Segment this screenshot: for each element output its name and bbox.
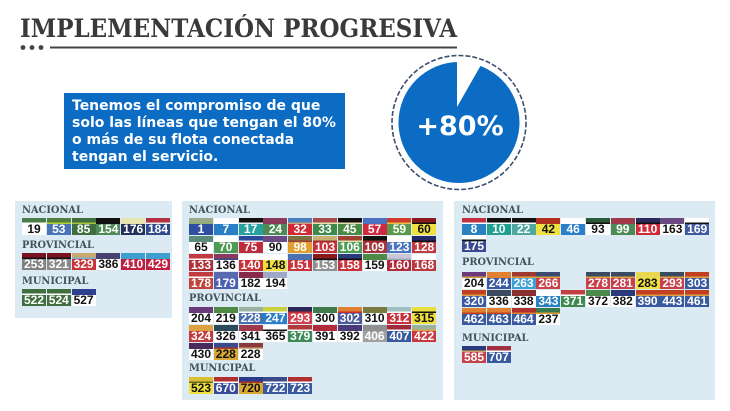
lines nacional: 128 — [414, 240, 434, 254]
pie icon: +80%: +80% — [416, 111, 504, 142]
heading: nacional: NACIONAL — [189, 205, 250, 216]
lines nacional: 22 — [517, 222, 530, 236]
lines provincial: 278 — [588, 276, 608, 290]
lines nacional: 98 — [294, 240, 307, 254]
lines nacional: 184 — [148, 222, 168, 236]
panel: right lines — [454, 201, 715, 400]
lines municipal: 523 — [191, 381, 211, 395]
lines provincial: 219 — [216, 311, 236, 325]
lines provincial: 204 — [464, 276, 484, 290]
lines nacional: 163 — [662, 222, 682, 236]
lines nacional: 160 — [389, 258, 409, 272]
lines nacional: 53 — [52, 222, 65, 236]
lines provincial: 228 — [216, 347, 236, 361]
lines provincial: 253 — [24, 257, 44, 271]
lines nacional: 136 — [216, 258, 236, 272]
lines provincial: 464 — [514, 312, 534, 326]
lines provincial: 338 — [514, 294, 534, 308]
lines provincial: 336 — [489, 294, 509, 308]
lines nacional: 57 — [368, 222, 381, 236]
lines municipal: 670 — [216, 381, 236, 395]
lines municipal — [189, 377, 312, 395]
lines provincial: 372 — [588, 294, 608, 308]
lines provincial: 371 — [563, 294, 583, 308]
lines nacional: 75 — [244, 240, 257, 254]
lines provincial: 293 — [290, 311, 310, 325]
lines nacional — [22, 218, 170, 236]
lines provincial: 341 — [241, 329, 261, 343]
lines nacional: 19 — [27, 222, 41, 236]
heading: provincial: PROVINCIAL — [189, 293, 261, 304]
lines nacional — [189, 218, 436, 290]
lines provincial: 382 — [613, 294, 633, 308]
lines provincial: 406 — [365, 329, 385, 343]
lines nacional: 90 — [269, 240, 282, 254]
lines nacional: 65 — [194, 240, 208, 254]
lines provincial: 463 — [489, 312, 509, 326]
title: IMPLEMENTACIÓN PROGRESIVA — [20, 14, 457, 43]
lines nacional: 175 — [464, 239, 484, 253]
callout: commitment text: solo las líneas que tengan el 80% — [72, 115, 336, 131]
heading: provincial: PROVINCIAL — [22, 240, 94, 251]
lines municipal — [462, 346, 511, 364]
lines municipal: 527 — [74, 293, 94, 307]
lines nacional: 70 — [219, 240, 232, 254]
lines nacional: 60 — [417, 222, 431, 236]
heading: nacional: NACIONAL — [462, 205, 523, 216]
lines provincial: 302 — [340, 311, 360, 325]
callout: commitment text: tengan el servicio. — [72, 149, 218, 165]
lines nacional — [462, 218, 709, 253]
lines provincial: 386 — [98, 257, 118, 271]
lines provincial: 312 — [389, 311, 409, 325]
lines nacional: 168 — [414, 258, 434, 272]
lines provincial: 315 — [414, 311, 434, 325]
lines nacional: 151 — [290, 258, 310, 272]
title rule with dots — [20, 45, 457, 50]
lines nacional: 10 — [492, 222, 505, 236]
lines provincial: 244 — [489, 276, 509, 290]
heading: municipal: MUNICIPAL — [22, 276, 88, 287]
lines nacional: 194 — [265, 276, 285, 290]
lines nacional: 7 — [222, 222, 229, 236]
callout: commitment text: o más de su flota conectada — [72, 132, 294, 148]
lines nacional: 153 — [315, 258, 335, 272]
panel: center lines — [182, 201, 443, 400]
lines municipal: 722 — [265, 381, 285, 395]
lines municipal: 524 — [49, 293, 69, 307]
heading: municipal: MUNICIPAL — [189, 363, 255, 374]
lines provincial: 321 — [49, 257, 69, 271]
lines provincial: 281 — [613, 276, 633, 290]
lines provincial: 293 — [662, 276, 682, 290]
lines nacional: 158 — [340, 258, 360, 272]
pie icon: +80% — [391, 54, 527, 190]
lines provincial: 461 — [687, 294, 707, 308]
lines provincial: 204 — [191, 311, 211, 325]
lines municipal: 720 — [241, 381, 261, 395]
lines provincial: 310 — [365, 311, 385, 325]
lines nacional: 159 — [365, 258, 385, 272]
lines nacional: 106 — [340, 240, 360, 254]
lines nacional: 123 — [389, 240, 409, 254]
lines nacional: 8 — [471, 222, 477, 236]
heading: municipal: MUNICIPAL — [462, 333, 528, 344]
lines provincial: 300 — [315, 311, 335, 325]
lines nacional: 17 — [244, 222, 257, 236]
lines provincial — [22, 253, 170, 271]
callout: commitment text: Tenemos el compromiso de que — [72, 98, 320, 114]
lines provincial: 391 — [315, 329, 335, 343]
lines provincial: 407 — [389, 329, 409, 343]
lines provincial: 430 — [191, 347, 211, 361]
lines nacional: 179 — [216, 276, 236, 290]
lines provincial: 263 — [514, 276, 534, 290]
lines provincial: 303 — [687, 276, 707, 290]
lines provincial: 410 — [123, 257, 143, 271]
lines provincial: 379 — [290, 329, 310, 343]
lines nacional: 176 — [123, 222, 143, 236]
lines nacional: 46 — [566, 222, 580, 236]
lines provincial: 462 — [464, 312, 484, 326]
lines nacional: 59 — [393, 222, 406, 236]
lines nacional: 133 — [191, 258, 211, 272]
lines nacional: 178 — [191, 276, 211, 290]
lines nacional: 109 — [365, 240, 385, 254]
lines nacional: 24 — [269, 222, 282, 236]
lines provincial: 228 — [241, 311, 261, 325]
lines nacional: 103 — [315, 240, 335, 254]
lines nacional: 154 — [98, 222, 118, 236]
lines nacional: 110 — [638, 222, 657, 236]
lines nacional: 182 — [241, 276, 261, 290]
lines provincial: 429 — [148, 257, 168, 271]
lines provincial: 365 — [265, 329, 285, 343]
lines nacional: 169 — [687, 222, 707, 236]
lines provincial: 247 — [265, 311, 285, 325]
heading: nacional: NACIONAL — [22, 205, 83, 216]
lines provincial: 320 — [464, 294, 484, 308]
lines provincial — [462, 272, 709, 326]
lines municipal — [22, 289, 96, 307]
lines provincial — [189, 307, 436, 361]
lines provincial: 422 — [414, 329, 434, 343]
lines nacional: 1 — [198, 222, 204, 236]
lines nacional: 85 — [77, 222, 90, 236]
heading: provincial: PROVINCIAL — [462, 257, 534, 268]
lines nacional: 93 — [591, 222, 605, 236]
lines provincial: 443 — [662, 294, 682, 308]
lines provincial: 324 — [191, 329, 211, 343]
lines provincial: 343 — [538, 294, 558, 308]
panel: left lines — [15, 201, 172, 318]
lines provincial: 228 — [241, 347, 261, 361]
lines provincial: 266 — [538, 276, 558, 290]
lines provincial: 329 — [74, 257, 94, 271]
lines provincial: 326 — [216, 329, 236, 343]
lines provincial: 237 — [538, 312, 558, 326]
lines nacional: 45 — [343, 222, 356, 236]
lines municipal: 522 — [24, 293, 44, 307]
lines nacional: 99 — [616, 222, 629, 236]
lines nacional: 42 — [542, 222, 555, 236]
lines municipal: 723 — [290, 381, 310, 395]
lines nacional: 32 — [294, 222, 307, 236]
lines nacional: 140 — [241, 258, 261, 272]
lines municipal: 707 — [489, 350, 509, 364]
lines nacional: 33 — [318, 222, 332, 236]
lines provincial: 283 — [638, 276, 658, 290]
callout: commitment text — [64, 93, 345, 169]
lines municipal: 585 — [464, 350, 484, 364]
lines provincial: 392 — [340, 329, 360, 343]
lines provincial: 390 — [638, 294, 658, 308]
lines nacional: 148 — [265, 258, 285, 272]
